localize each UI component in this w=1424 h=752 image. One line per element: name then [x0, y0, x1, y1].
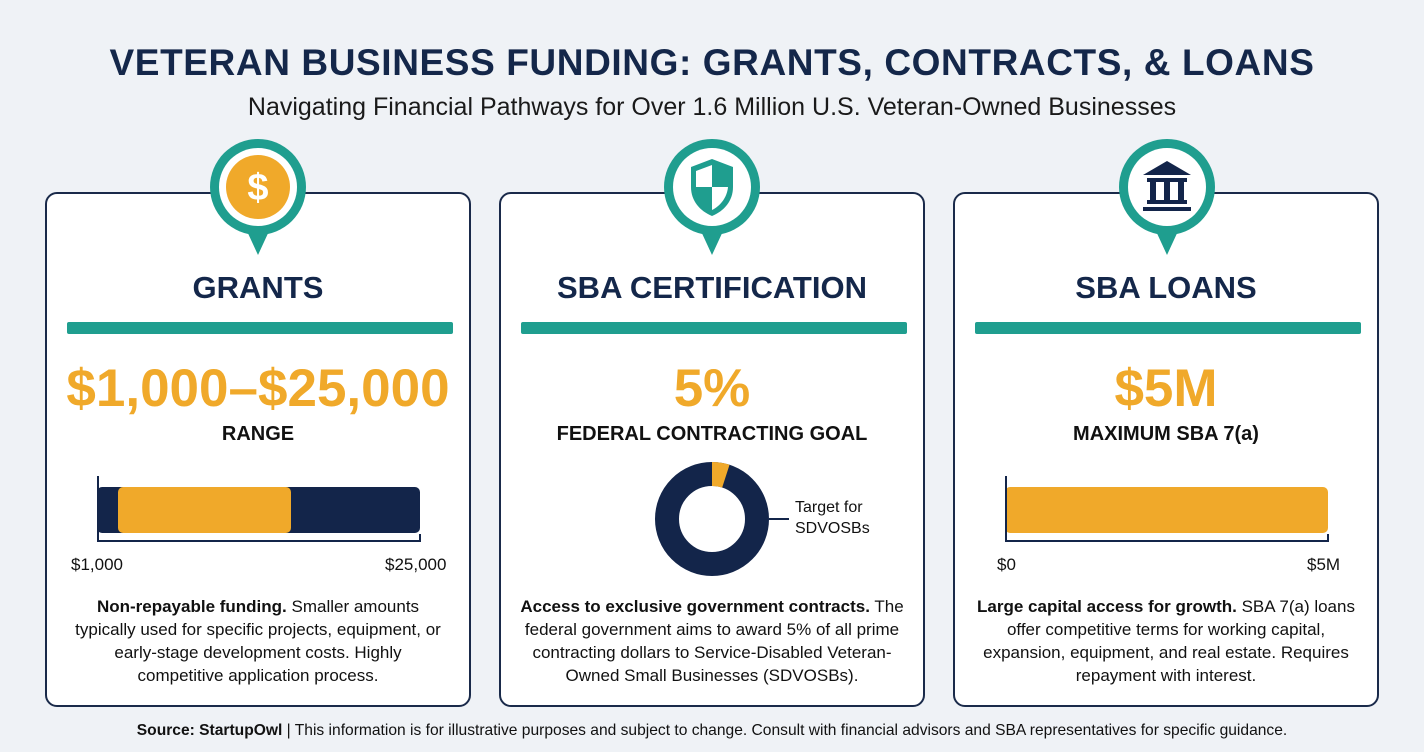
footer: source: Source: StartupOwl | This information is for illustrative purposes and subject to change. Consult with financial advisors and SBA representatives for specific guidance. — [137, 722, 1287, 739]
icon: bank pin — [1119, 139, 1215, 255]
panel: sba loans — [953, 192, 1379, 707]
title: VETERAN BUSINESS FUNDING: GRANTS, CONTRACTS, & LOANS — [110, 42, 1314, 83]
text: certification description: Access to exclusive government contracts. The federal government aims to award 5% of all prime contracting dollars to Service-Disabled Veteran-Owned Small Businesses (SDVOSBs). — [520, 597, 904, 685]
donut chart — [655, 462, 870, 576]
big number: $5M: $5M — [1114, 359, 1218, 418]
panel: grants — [45, 192, 471, 707]
donut chart: Target for — [795, 499, 863, 516]
bar chart: grant range — [71, 476, 446, 574]
label: range: RANGE — [222, 423, 294, 445]
heading: certification: SBA CERTIFICATION — [557, 270, 867, 305]
icon: dollar pin — [210, 139, 306, 255]
bar chart: loan max: $0 — [997, 555, 1016, 574]
bar chart: grant range: $25,000 — [385, 555, 446, 574]
subtitle: Navigating Financial Pathways for Over 1.6 Million U.S. Veteran-Owned Businesses — [248, 93, 1176, 121]
label: goal: FEDERAL CONTRACTING GOAL — [557, 423, 867, 445]
bar chart: loan max: $5M — [1307, 555, 1340, 574]
bar chart: loan max — [997, 476, 1340, 574]
big number: 5%: 5% — [674, 359, 750, 418]
big number: grant range: $1,000–$25,000 — [66, 359, 450, 418]
icon: dollar pin: $ — [247, 167, 269, 209]
text: grants description: Non-repayable funding. Smaller amounts typically used for specific projects, equipment, or early-stage development costs. Highly competitive application process. — [75, 597, 441, 685]
bar chart: grant range: $1,000 — [71, 555, 123, 574]
donut chart: SDVOSBs — [795, 520, 870, 537]
heading: grants: GRANTS — [193, 270, 323, 305]
panel: sba certification — [499, 192, 925, 707]
text: loans description: Large capital access for growth. SBA 7(a) loans offer competitive terms for working capital, expansion, equipment, and real estate. Requires repayment with interest. — [977, 597, 1355, 685]
label: max: MAXIMUM SBA 7(a) — [1073, 423, 1259, 445]
icon: shield pin — [664, 139, 760, 255]
heading: loans: SBA LOANS — [1075, 270, 1257, 305]
